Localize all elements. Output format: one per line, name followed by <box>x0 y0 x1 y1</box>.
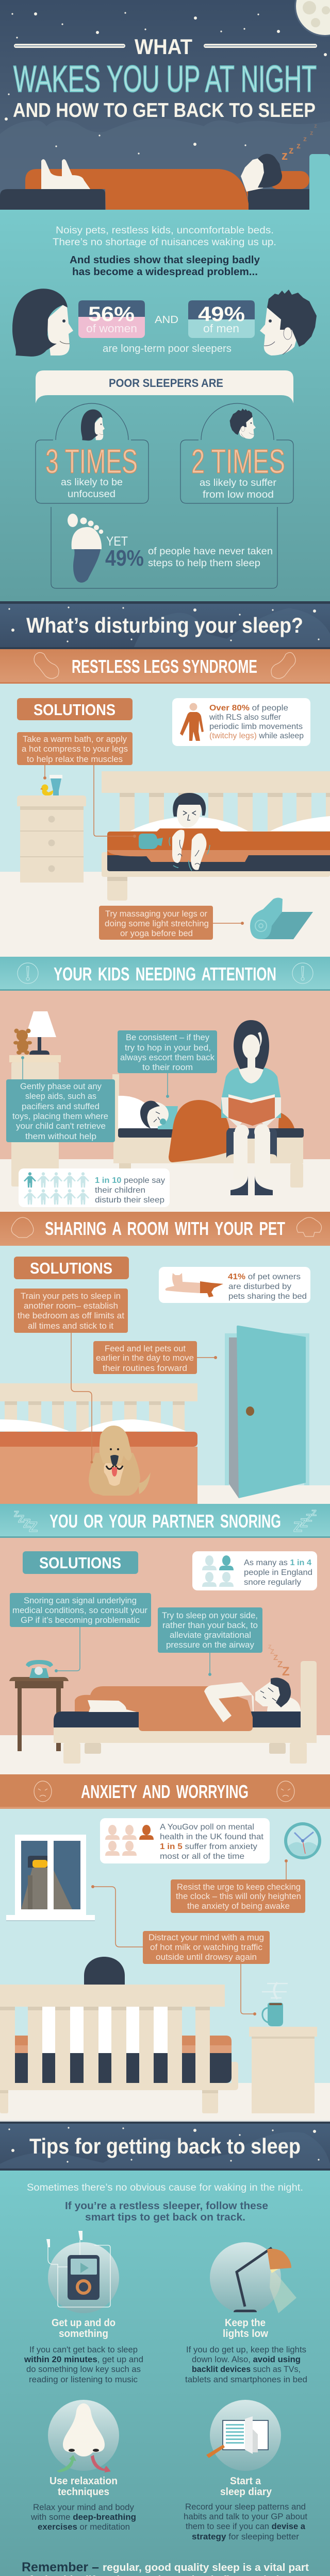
icon: exclamation bubbles <box>18 963 313 984</box>
icon: clock <box>284 1822 321 1859</box>
icon: z outlines: Z <box>306 1513 312 1524</box>
tip: distract your mind: of hot milk or watching traffic <box>150 1942 263 1952</box>
icon: snoring z's: z <box>314 122 317 129</box>
tip: gently phase out: them without help <box>25 1131 96 1141</box>
body text: If you do get up, keep the lights <box>186 2345 306 2354</box>
body text: with some deep-breathing <box>30 2512 136 2522</box>
body text: down low. Also, avoid using <box>192 2354 301 2364</box>
bold intro text: smart tips to get back on track. <box>85 2212 245 2223</box>
tip: train your pets: Train your pets to sleep in <box>21 1291 121 1301</box>
text: 41% of pet owners <box>228 1273 301 1281</box>
tip: start a sleep diary <box>184 2400 307 2541</box>
connector arrows <box>45 765 242 923</box>
tip: be consistent: to their room <box>142 1062 193 1072</box>
text: as likely to suffer from low mood: as likely to suffer <box>200 478 277 488</box>
body text: habits and talk to your GP about <box>184 2512 307 2521</box>
tip: sleep on your side: rather than your back, to <box>162 1620 258 1630</box>
icon: snoring z's: Z <box>277 1659 283 1669</box>
intro text: There’s no shortage of nuisances waking us up. <box>53 237 276 248</box>
number: 2 times: 2 TIMES <box>191 442 285 480</box>
text <box>160 1823 264 1861</box>
icon: diary and pen <box>206 2400 281 2471</box>
tip: massage or stretch <box>99 906 213 940</box>
text <box>95 1176 165 1205</box>
icon: small woman head <box>81 410 105 440</box>
tip: be consistent: always escort them back <box>120 1053 214 1062</box>
stat: 49 percent of men <box>188 300 255 338</box>
tip: be consistent: Be consistent – if they <box>126 1032 209 1042</box>
body text <box>24 2345 143 2384</box>
icon: lamp <box>25 1011 56 1055</box>
tip: snoring can signal <box>10 1593 151 1627</box>
bed with child <box>112 1074 304 1188</box>
bold intro text: has become a widespread problem... <box>72 266 258 278</box>
text: as likely to suffer from low mood <box>200 478 277 500</box>
heading: Start a <box>230 2476 261 2487</box>
body text: within 20 minutes, get up and <box>24 2354 143 2364</box>
window with street light <box>6 1835 95 1921</box>
tip: resist the urge <box>171 1879 305 1913</box>
tip: distract your mind: Distract your mind with a mug <box>148 1933 264 1942</box>
icon: z outlines: Z <box>300 1516 308 1530</box>
body text: strategy for sleeping better <box>192 2532 299 2541</box>
text: 1 in 10 people say <box>95 1176 165 1185</box>
icon: snoring z's: z <box>282 149 288 163</box>
solutions label: SOLUTIONS <box>34 701 116 719</box>
tip: gently phase out <box>6 1079 115 1142</box>
icon: cat <box>166 1273 223 1297</box>
heading <box>220 2476 272 2498</box>
title: what: WHAT <box>135 35 192 59</box>
panel: pet scene <box>0 1246 330 1504</box>
icon: dog outlines <box>11 1217 322 1238</box>
connectors <box>23 1058 168 1096</box>
text: A YouGov poll on mental <box>160 1823 254 1832</box>
panel: kids scene <box>0 991 330 1212</box>
heading: something <box>59 2328 108 2340</box>
nightstand with lamp and teddy <box>9 1011 61 1187</box>
solutions label <box>14 1257 129 1279</box>
icon: snoring z's: Z <box>273 1653 278 1662</box>
icon: snoring z's <box>268 1644 290 1679</box>
icon: yoga mat <box>250 897 313 939</box>
connectors <box>71 1333 216 1462</box>
icon: foot outlines <box>34 652 295 679</box>
panel: tips section <box>0 2171 330 2576</box>
icon: z outlines: Z <box>29 1519 38 1535</box>
bold intro text: If you’re a restless sleeper, follow these <box>65 2200 268 2212</box>
tip: gently phase out: pacifiers and stuffed <box>22 1101 100 1111</box>
tip: massage or stretch: doing some light stretching <box>105 919 209 928</box>
icon: rotary phone <box>26 1660 53 1678</box>
panel: intro teal section <box>0 210 330 601</box>
bed with twitching man <box>102 771 330 901</box>
text: remember: regular, good quality sleep is a vital part <box>103 2562 309 2573</box>
body text: tablets and smartphones in bed <box>185 2375 307 2384</box>
text: Over 80% of people <box>209 704 288 713</box>
tip: distract your mind: outside until drowsy again <box>156 1952 257 1962</box>
tip: massage or stretch: Try massaging your legs or <box>105 909 207 919</box>
tip: distract your mind <box>143 1931 270 1964</box>
body text: Record your sleep patterns and <box>185 2502 306 2512</box>
nightstand with duck and tube <box>17 775 86 883</box>
icon: small man head <box>230 409 256 439</box>
tip: get up and do something <box>24 2231 143 2384</box>
header: restless legs syndrome <box>0 649 330 684</box>
stat callout: 1 in 4 <box>192 1551 317 1590</box>
man upper body and head <box>204 1677 291 1722</box>
heading <box>50 2476 118 2498</box>
tip: be consistent <box>118 1030 217 1073</box>
icon: man head <box>260 290 317 355</box>
connector dots <box>91 1356 217 1463</box>
body text: exercises or meditation <box>38 2522 130 2532</box>
stat: 56 percent of women: of women <box>86 322 137 335</box>
icon: hot water bottle <box>139 834 163 849</box>
tip: resist the urge: the anxiety of being awake <box>187 1901 290 1911</box>
body text <box>185 2345 307 2384</box>
body text: backlit devices such as TVs, <box>192 2364 301 2374</box>
icon: z outlines: Z <box>14 1510 19 1519</box>
tip: gently phase out: your child can't retrieve <box>16 1121 106 1131</box>
body text: Relax your mind and body <box>33 2502 134 2512</box>
panel: anxiety scene <box>0 1809 330 2122</box>
stat callout: over 80 percent <box>172 698 310 746</box>
icon: woman head <box>12 289 73 357</box>
icon: z outlines: Z <box>293 1519 302 1535</box>
heading: What’s disturbing your sleep? <box>26 613 303 637</box>
text: as likely to be unfocused: as likely to be <box>61 477 123 488</box>
stat callout: 41 percent <box>159 1267 310 1303</box>
tip: warm bath <box>17 732 133 765</box>
icon: z outlines <box>14 1509 317 1535</box>
stat: 56 percent of women: 56% <box>88 303 135 326</box>
panel: 49 percent footprint <box>51 507 277 588</box>
heading: Keep the <box>225 2317 266 2329</box>
text: are disturbed by <box>228 1282 291 1291</box>
bold intro text <box>65 2200 268 2223</box>
heading: sleep diary <box>220 2486 272 2498</box>
child face <box>140 1101 178 1129</box>
text: of people have never taken steps <box>148 546 273 569</box>
solutions label <box>17 698 133 720</box>
icon: music player <box>46 2231 119 2313</box>
heading: Get up and do <box>52 2317 116 2329</box>
header: you or your partner snoring <box>0 1504 330 1538</box>
nightstand with mug <box>249 1982 317 2113</box>
connectors <box>56 1627 210 1674</box>
text: remember: Remember – <box>22 2560 99 2574</box>
icon: moon <box>294 0 330 37</box>
heading: techniques <box>58 2486 109 2498</box>
icon: z outlines: Z <box>18 1514 24 1525</box>
header: your kids needing attention <box>0 957 330 991</box>
header: anxiety and worrying <box>0 1774 330 1809</box>
heading <box>223 2317 268 2340</box>
door knob <box>246 1406 254 1416</box>
icon: snoring z's: Z <box>268 1644 272 1650</box>
body text <box>30 2502 136 2532</box>
text <box>244 1558 312 1587</box>
icon: worried faces <box>34 1781 294 1802</box>
woman reading a book <box>221 1020 281 1195</box>
stat: 49 percent of men: 49% <box>198 303 245 326</box>
icon: twitching feet <box>169 830 210 871</box>
solutions label <box>23 1551 138 1574</box>
tip: sleep on your side: Try to sleep on your side, <box>162 1611 258 1620</box>
text: periodic limb movements <box>209 722 303 731</box>
intro text: Noisy pets, restless kids, uncomfortable beds. <box>56 225 274 236</box>
text: as likely to be unfocused: unfocused <box>68 489 116 500</box>
tip: feed and let pets out: their routines forward <box>103 1363 187 1373</box>
tip: train your pets: another room– establish <box>24 1301 118 1311</box>
intro text: Sometimes there’s no obvious cause for waking in the night. <box>27 2182 303 2193</box>
solutions label: SOLUTIONS <box>39 1554 121 1572</box>
tip: warm bath: to help relax the muscles <box>27 754 123 764</box>
bed seen from behind <box>0 1985 238 2113</box>
text: their children <box>95 1186 145 1195</box>
bed with sleeping man <box>54 1661 317 1764</box>
text: (twitchy legs) while asleep <box>209 732 304 740</box>
stat callout: 1 in 5 <box>100 1818 270 1863</box>
connectors <box>93 1861 286 2014</box>
text: of people have never taken steps: of people have never taken <box>148 546 273 557</box>
solutions label: SOLUTIONS <box>30 1259 112 1277</box>
bed <box>0 1383 197 1504</box>
text: people in England <box>244 1568 312 1577</box>
tip: sleep on your side: alleviate gravitational <box>170 1630 251 1640</box>
icon: snoring z's: Z <box>282 1665 290 1679</box>
text: 1 in 5 suffer from anxiety <box>160 1842 257 1851</box>
text: As many as 1 in 4 <box>244 1558 311 1567</box>
tip: resist the urge: Resist the urge to keep checking <box>177 1882 301 1892</box>
tip: feed and let pets out <box>93 1341 197 1374</box>
bold intro text <box>70 255 260 278</box>
icon: four people <box>202 1555 234 1587</box>
body text: them to see if you can devise a <box>186 2521 306 2531</box>
text: of people have never taken steps: steps to help them sleep <box>148 558 260 569</box>
blanket <box>169 1100 294 1162</box>
text: pets sharing the bed <box>228 1292 307 1301</box>
stat: 56 percent of women <box>78 300 145 338</box>
tip: sleep on your side: pressure on the airway <box>166 1640 254 1650</box>
panel: hero night sky <box>0 0 330 216</box>
banner: poor sleepers are: POOR SLEEPERS ARE <box>109 377 223 389</box>
text: yet 49 percent: YET <box>106 534 128 549</box>
icon: z outlines: Z <box>311 1509 317 1518</box>
title: what <box>14 35 317 59</box>
tip: snoring can signal: medical conditions, so consult your <box>12 1605 147 1615</box>
body text <box>184 2502 307 2541</box>
icon: half-filled footprint <box>68 514 103 583</box>
tip: snoring can signal: GP if it’s becoming problematic <box>21 1615 140 1625</box>
tip: snoring can signal: Snoring can signal underlying <box>24 1596 137 1605</box>
text <box>228 1273 307 1301</box>
icon: z outlines: Z <box>23 1517 31 1531</box>
heading: Use relaxation <box>50 2476 118 2487</box>
panel: snoring scene <box>0 1538 330 1774</box>
body text: reading or listening to music <box>29 2375 138 2384</box>
panel: restless legs scene <box>0 684 330 957</box>
intro text <box>53 225 276 248</box>
tip: feed and let pets out: Feed and let pets out <box>105 1344 186 1353</box>
header: sharing a room with your pet <box>0 1212 330 1246</box>
tip: feed and let pets out: earlier in the day to move <box>96 1353 194 1363</box>
band: what's disturbing your sleep <box>0 601 330 649</box>
text: most or all of the time <box>160 1852 244 1861</box>
text: yet 49 percent <box>105 534 144 571</box>
tip: gently phase out: Gently phase out any <box>20 1081 102 1091</box>
bold intro text: And studies show that sleeping badly <box>70 255 260 266</box>
man head <box>173 793 206 828</box>
text: as likely to be unfocused <box>61 477 123 500</box>
text: remember <box>22 2560 309 2576</box>
heading: RESTLESS LEGS SYNDROME <box>72 656 257 677</box>
panel: 3 times unfocused <box>36 403 148 503</box>
street light <box>21 1856 72 1909</box>
tip: train your pets <box>14 1289 128 1333</box>
band: tips for getting back to sleep <box>0 2122 330 2171</box>
tip: gently phase out: sleep aids, such as <box>25 1091 96 1101</box>
heading: lights low <box>223 2328 268 2340</box>
panel: 2 times low mood <box>180 403 293 503</box>
icon: snoring z's: z <box>296 142 301 150</box>
tip: use relaxation techniques <box>30 2400 136 2532</box>
bedside table with phone <box>9 1660 69 1751</box>
text <box>209 704 304 740</box>
icon: ten people <box>24 1172 89 1205</box>
body text: If you can't get back to sleep <box>29 2345 138 2354</box>
connector dots <box>21 1056 169 1098</box>
icon: tube <box>50 775 62 795</box>
tip: keep the lights low <box>185 2242 307 2384</box>
icon: snoring z's: Z <box>270 1648 274 1655</box>
icon: nose with breath arrows <box>48 2400 119 2472</box>
text: with RLS also suffer <box>209 713 282 722</box>
stat: 49 percent of men: of men <box>203 322 239 335</box>
connector dots <box>91 1859 288 2015</box>
tip: sleep on your side <box>158 1607 262 1653</box>
person's head behind bed <box>84 1957 125 1985</box>
text: as likely to suffer from low mood: from low mood <box>203 489 274 500</box>
tip: be consistent: try to hop in your bed, <box>125 1043 211 1053</box>
heading <box>52 2317 116 2340</box>
tip: resist the urge: the clock – this will only heighten <box>176 1891 301 1901</box>
icon: dog <box>89 1426 151 1496</box>
icon: desk lamp <box>210 2242 296 2313</box>
text: are long-term poor sleepers: are long-term poor sleepers <box>103 343 232 354</box>
tip: warm bath: Take a warm bath, or apply <box>23 734 127 744</box>
banner: poor sleepers are <box>36 370 293 403</box>
text: snore regularly <box>244 1578 301 1587</box>
connector dots <box>43 776 244 925</box>
icon: snoring z's: z <box>303 134 307 143</box>
number: 3 times: 3 TIMES <box>45 442 138 480</box>
icon: rubber duck <box>40 784 53 795</box>
icon: snoring z's: z <box>310 129 314 137</box>
heading: ANXIETY AND WORRYING <box>81 1781 249 1802</box>
text: disturb their sleep <box>95 1196 164 1205</box>
illustration: man in bed with feet sticking out <box>0 154 330 216</box>
icon: person <box>180 703 204 741</box>
text: and: AND <box>155 314 178 326</box>
icon: snoring z's <box>282 122 317 163</box>
text: yet 49 percent: 49% <box>105 546 144 571</box>
icon: snoring z's: z <box>289 145 294 156</box>
stat callout: 1 in 10 <box>19 1168 170 1207</box>
icon: five people <box>105 1825 154 1856</box>
text: health in the UK found that <box>160 1833 264 1841</box>
tip: gently phase out: toys, placing them where <box>12 1111 108 1121</box>
icon: teddy bear <box>13 1028 32 1055</box>
tip: train your pets: all times and stick to it <box>28 1321 113 1331</box>
icon: mug with steam <box>262 1982 288 2026</box>
heading: Tips for getting back to sleep <box>29 2134 301 2158</box>
tip: massage or stretch: or yoga before bed <box>120 928 193 938</box>
door <box>225 1326 309 1498</box>
body text: do something low key such as <box>26 2364 141 2374</box>
connector dots <box>55 1669 211 1676</box>
tip: warm bath: a hot compress to your legs <box>22 744 128 754</box>
stars <box>5 12 327 155</box>
tip: train your pets: the bedroom as off limits at <box>18 1311 124 1320</box>
